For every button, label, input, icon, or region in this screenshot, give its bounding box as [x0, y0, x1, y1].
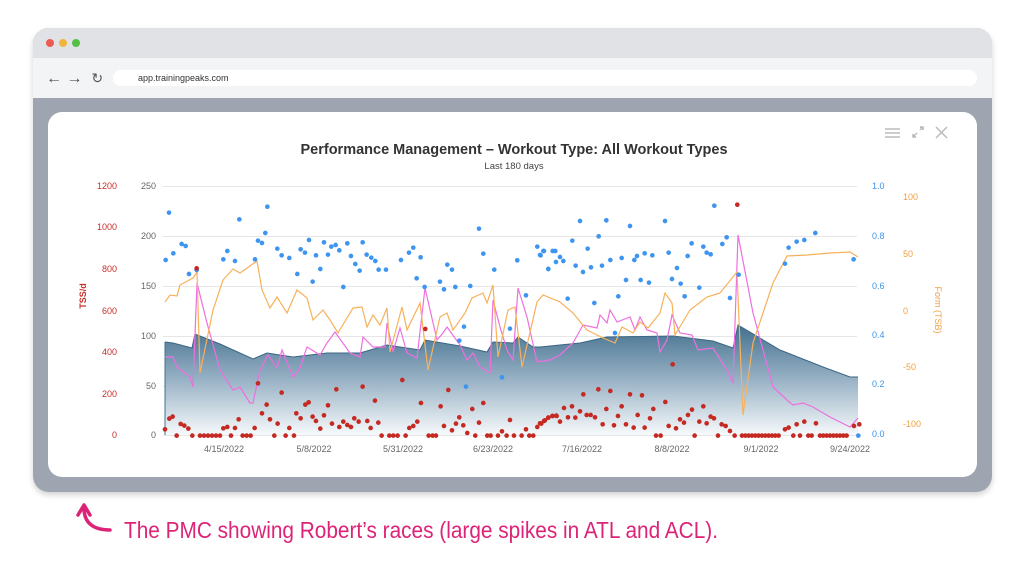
x axis dates: 7/16/2022 [562, 444, 602, 454]
nav icons: ← → ↻ [46, 70, 103, 87]
axis: Form orange: Form (TSB) [933, 286, 943, 334]
title bar [33, 28, 992, 58]
axis: left gray: 0 [151, 430, 156, 440]
axis: IF blue: 0.8 [872, 231, 885, 241]
axis: TSS/d red [78, 181, 117, 440]
axis: left gray: 100 [141, 331, 156, 341]
TSS dots (red) [165, 205, 859, 436]
axis: left gray: 250 [141, 181, 156, 191]
axis: TSS/d red: 200 [102, 389, 117, 399]
axis: left gray: 200 [141, 231, 156, 241]
IF dots (blue) [166, 206, 858, 436]
chart title: Last 180 days [484, 161, 544, 172]
x axis dates: 5/31/2022 [383, 444, 423, 454]
axis: TSS/d red: TSS/d [78, 283, 88, 309]
axis: TSS/d red: 600 [102, 306, 117, 316]
axis: Form orange: 50 [903, 249, 913, 259]
axis: Form orange: 0 [903, 306, 908, 316]
x axis dates [204, 444, 870, 454]
chart title: Performance Management – Workout Type: All Workout Types [300, 142, 728, 158]
axis: IF blue: 0.2 [872, 379, 885, 389]
url field: app.trainingpeaks.com [138, 73, 229, 83]
arrow: curved pointer [78, 505, 110, 530]
axis: left gray: 50 [146, 381, 156, 391]
url field [113, 70, 977, 86]
x axis dates: 4/15/2022 [204, 444, 244, 454]
x axis dates: 9/24/2022 [830, 444, 870, 454]
menu icons [885, 126, 948, 138]
axis: TSS/d red: 800 [102, 264, 117, 274]
axis: IF blue: 1.0 [872, 181, 885, 191]
browser window [33, 28, 992, 492]
x axis dates: 5/8/2022 [296, 444, 332, 454]
x axis dates: 8/8/2022 [654, 444, 690, 454]
axis: TSS/d red: 1200 [97, 181, 117, 191]
axis: TSS/d red: 1000 [97, 222, 117, 232]
window buttons [46, 39, 80, 47]
axis: IF blue: 0.0 [872, 429, 885, 439]
axis: Form orange: -50 [903, 362, 916, 372]
address bar row [33, 58, 992, 98]
caption: The PMC showing Robert’s races (large spikes in ATL and ACL). [124, 517, 718, 543]
fitness area [165, 325, 858, 435]
axis: IF blue: 0.6 [872, 281, 885, 291]
form line (orange) [165, 252, 858, 415]
axis: TSS/d red: 400 [102, 347, 117, 357]
axis: Form orange: -100 [903, 419, 921, 429]
axis: left gray: 150 [141, 281, 156, 291]
axis: IF blue [872, 181, 885, 439]
axis: Form orange: 100 [903, 192, 918, 202]
fatigue line (magenta) [165, 235, 858, 427]
x axis dates: 6/23/2022 [473, 444, 513, 454]
chart card [48, 112, 977, 477]
axis: Form orange [903, 192, 943, 429]
chart title [300, 142, 728, 172]
axis: TSS/d red: 0 [112, 430, 117, 440]
x axis dates: 9/1/2022 [743, 444, 779, 454]
axis: IF blue: 0.4 [872, 330, 885, 340]
axis: left gray [141, 181, 156, 440]
